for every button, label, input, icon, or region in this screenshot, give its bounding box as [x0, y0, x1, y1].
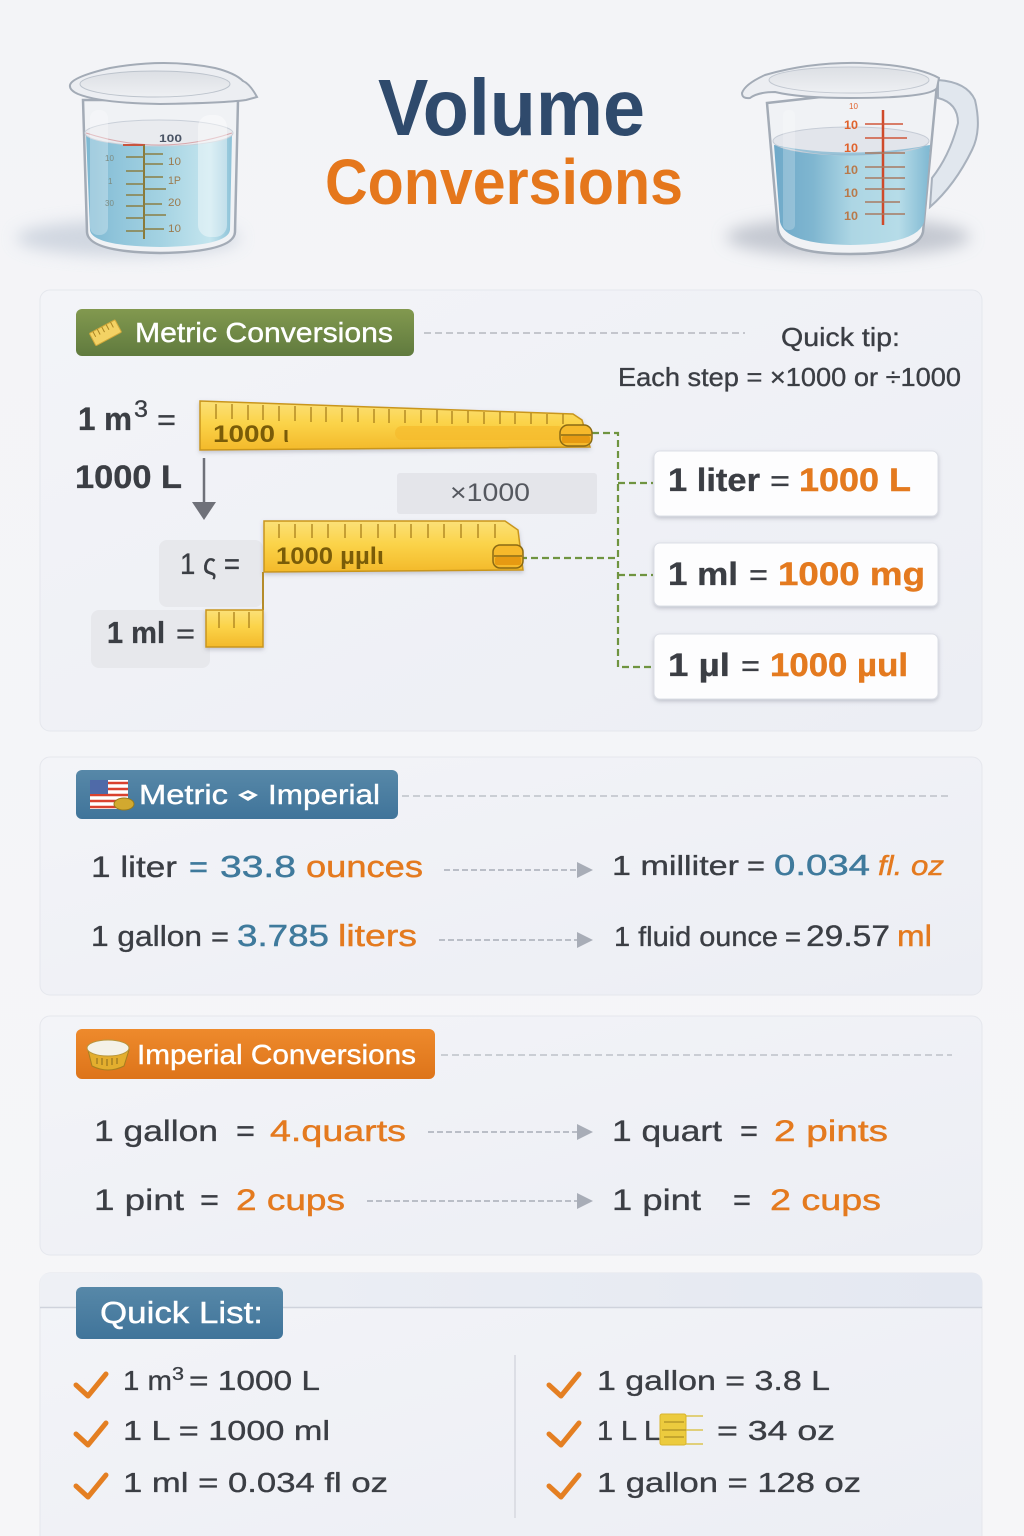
label: 1 ml	[91, 610, 210, 668]
list item: litre to ounces: 1 L L	[597, 1415, 660, 1446]
row: pint to cups: =	[200, 1184, 219, 1217]
list item: cubic metre: = 1000 L	[189, 1365, 320, 1396]
icon: glass beaker with water: 30	[105, 199, 114, 208]
panel: metric to imperial	[40, 757, 982, 995]
list item: millilitre	[76, 1467, 388, 1498]
card: 1 microlitre	[654, 634, 938, 699]
label: 1 litre: 1 ς =	[180, 548, 240, 581]
row: gallon to quarts: =	[236, 1115, 255, 1148]
title: Volume	[378, 63, 645, 152]
arrow	[439, 932, 593, 948]
icon: tape measure	[87, 1040, 129, 1070]
label: 1 cubic metre	[78, 396, 176, 437]
row: quart to pints	[612, 1115, 888, 1148]
card: 1 microlitre: =	[741, 650, 760, 683]
row: fluid ounce to ml: 1 fluid ounce	[614, 921, 778, 952]
card: 1 ml	[654, 543, 938, 606]
icon: glass beaker with water: 10	[105, 154, 114, 163]
icon: measuring jug with water: 10	[844, 118, 858, 132]
ruler: 1000 ml	[264, 521, 523, 572]
row: litre to ounces: 33.8	[220, 849, 296, 884]
heading: imperial conversions	[76, 1029, 435, 1079]
icon: measuring jug with water	[726, 63, 978, 257]
icon: measuring jug with water: 10	[844, 209, 858, 223]
icon: glass beaker with water	[16, 63, 257, 256]
heading: metric to imperial: Metric	[139, 779, 228, 810]
heading: metric conversions: Metric Conversions	[135, 317, 393, 348]
icon: glass beaker with water: 10	[168, 223, 181, 235]
row: millilitre to fl oz: 1 milliter	[612, 850, 739, 881]
icon: measuring jug with water: 10	[844, 141, 858, 155]
label: 1000 L: 1000 L	[75, 459, 182, 495]
heading: metric to imperial: Imperial	[268, 779, 380, 810]
icon: glass beaker with water: 10	[168, 156, 181, 168]
list item: gallon to ounces: 1 gallon = 128 oz	[597, 1467, 861, 1498]
row: pint to cups right: =	[733, 1184, 751, 1217]
list item: gallon to litres: 1 gallon = 3.8 L	[597, 1365, 830, 1396]
text block: quick tip: Each step = ×1000 or ÷1000	[618, 362, 961, 392]
label: 1 ml: 1 ml	[107, 615, 165, 650]
row: litre to ounces: =	[189, 851, 208, 884]
row: pint to cups right	[612, 1184, 881, 1217]
arrow: down	[192, 458, 216, 520]
row: pint to cups	[94, 1184, 345, 1217]
text block: quick tip: Quick tip:	[781, 322, 900, 352]
icon: glass beaker with water: 1P	[168, 175, 181, 187]
card: 1 liter: 1000 L	[799, 462, 911, 498]
heading: metric conversions	[76, 309, 414, 356]
panel: imperial conversions	[40, 1016, 982, 1255]
list item: litre to ounces	[549, 1414, 835, 1446]
list item: litre to ounces: = 34 oz	[717, 1415, 835, 1446]
heading: quick list: Quick List:	[100, 1295, 263, 1330]
row: fluid ounce to ml: ml	[897, 920, 932, 953]
heading: imperial conversions: Imperial Conversions	[137, 1039, 416, 1070]
list item: litre	[76, 1415, 330, 1446]
label: 1 ml: =	[176, 618, 195, 649]
ruler: 1000 L	[200, 401, 592, 450]
card: 1 liter	[654, 451, 938, 516]
icon: flag	[90, 780, 134, 810]
label: 1 litre	[159, 540, 263, 607]
row: quart to pints: =	[740, 1115, 758, 1148]
card: 1 liter: =	[770, 465, 790, 498]
list item: cubic metre: 1 m	[123, 1365, 172, 1396]
ruler: small	[206, 572, 263, 647]
card: 1 ml: 1000 mg	[778, 556, 925, 592]
row: millilitre to fl oz: fl. oz	[878, 850, 944, 881]
row: fluid ounce to ml: =	[785, 921, 801, 952]
text block: quick tip	[618, 322, 961, 392]
row: litre to ounces: ounces	[306, 849, 423, 884]
ruler: 1000 L: ι	[283, 422, 289, 447]
badge: times 1000	[397, 473, 597, 514]
ruler: 1000 L: 1000	[213, 421, 275, 448]
row: pint to cups: 1 pint	[94, 1184, 185, 1217]
row: fluid ounce to ml	[614, 920, 932, 953]
card: 1 microlitre: 1 µl	[668, 647, 730, 683]
row: quart to pints: 1 quart	[612, 1115, 723, 1148]
list item: cubic metre: 3	[172, 1364, 184, 1384]
ruler: 1000 ml: 1000 µµlι	[276, 543, 384, 570]
icon: measuring jug with water: 10	[844, 186, 858, 200]
row: gallon to litres: liters	[338, 918, 417, 953]
icon: glass beaker with water: 100	[159, 133, 182, 145]
title	[325, 63, 683, 218]
row: millilitre to fl oz: =	[747, 850, 765, 881]
row: pint to cups right: 2 cups	[770, 1184, 881, 1217]
icon: glass beaker with water: 20	[168, 197, 181, 209]
label: 1 cubic metre: 3	[134, 396, 148, 423]
arrow	[367, 1193, 593, 1209]
row: gallon to quarts: 4.quarts	[270, 1115, 406, 1148]
label: 1 cubic metre: 1 m	[78, 401, 132, 437]
icon: measuring jug with water: 10	[849, 102, 858, 111]
row: pint to cups right: 1 pint	[612, 1184, 702, 1217]
row: millilitre to fl oz: 0.034	[774, 850, 870, 882]
arrow	[444, 862, 593, 878]
panel: metric conversions	[40, 290, 982, 731]
row: gallon to quarts	[94, 1115, 406, 1148]
row: pint to cups: 2 cups	[236, 1184, 345, 1217]
label: 1 cubic metre: =	[157, 404, 176, 437]
row: gallon to litres: 1 gallon	[91, 921, 202, 953]
heading: metric to imperial	[76, 770, 398, 819]
slider button	[493, 545, 523, 568]
row: gallon to litres: =	[211, 921, 229, 952]
row: gallon to quarts: 1 gallon	[94, 1115, 218, 1148]
row: litre to ounces	[91, 849, 423, 884]
card: 1 liter: 1 liter	[668, 462, 760, 498]
row: quart to pints: 2 pints	[774, 1115, 888, 1148]
row: millilitre to fl oz	[612, 850, 944, 882]
list item: litre: 1 L = 1000 ml	[123, 1415, 330, 1446]
row: fluid ounce to ml: 29.57	[806, 920, 890, 953]
arrow	[428, 1124, 593, 1140]
title: Conversions	[325, 146, 683, 218]
icon: small ruler	[660, 1414, 703, 1445]
row: litre to ounces: 1 liter	[91, 851, 177, 884]
list item: gallon to ounces	[549, 1467, 861, 1498]
badge: times 1000: ×1000	[450, 479, 530, 507]
list item: cubic metre	[76, 1364, 320, 1396]
card: 1 ml: 1 ml	[668, 556, 738, 592]
connector lines	[520, 433, 653, 667]
heading: quick list	[76, 1287, 283, 1339]
list item: gallon to litres	[549, 1365, 830, 1396]
row: gallon to litres: 3.785	[237, 918, 329, 953]
slider button	[560, 425, 592, 446]
list item: millilitre: 1 ml = 0.034 fl oz	[123, 1467, 388, 1498]
panel: quick list	[40, 1273, 982, 1536]
row: gallon to litres	[91, 918, 417, 953]
icon: glass beaker with water: 1	[108, 177, 113, 186]
card: 1 microlitre: 1000 µul	[770, 647, 908, 683]
card: 1 ml: =	[749, 559, 768, 592]
icon: measuring jug with water: 10	[844, 163, 858, 177]
